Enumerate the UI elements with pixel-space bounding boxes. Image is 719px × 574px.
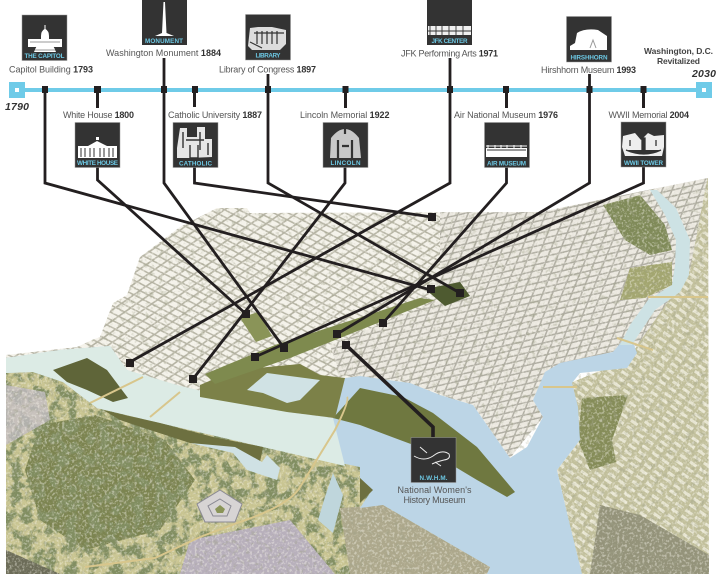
label: Lincoln Memorial: Lincoln Memorial 1922 <box>300 110 390 120</box>
icon: Hirshhorn: HIRSHHORN <box>570 54 608 62</box>
icon: WWII Tower: WWII TOWER <box>624 160 663 167</box>
map: pale upstream water <box>6 346 345 466</box>
line: National Women's History Museum <box>346 345 433 437</box>
label: Washington Monument: Washington Monument 1884 <box>106 48 221 58</box>
line: JFK Performing Arts <box>130 58 450 362</box>
icon: N.W.H.M.: N.W.H.M. <box>420 475 448 482</box>
end marker 2030 <box>691 68 716 98</box>
icon: Lincoln <box>323 122 368 168</box>
heading: Washington, D.C. Revitalized: Washington, D.C. <box>644 46 713 56</box>
icon: Monument <box>142 0 187 45</box>
timeline nodes <box>42 86 646 93</box>
map: upper river parkland <box>603 195 672 255</box>
connector lines <box>45 58 644 437</box>
map: East Potomac Park <box>333 388 515 497</box>
line: Lincoln Memorial <box>193 167 345 379</box>
icon: The Capitol <box>22 15 67 60</box>
map: small island <box>360 478 373 503</box>
line: Hirshhorn Museum <box>337 74 590 334</box>
map: Arlington cemetery forest <box>25 415 195 550</box>
line: Catholic University <box>194 167 432 217</box>
start marker 1790: 1790 <box>5 101 29 113</box>
map: northeast city blocks <box>440 170 709 400</box>
heading: Washington, D.C. Revitalized <box>644 46 713 66</box>
map: Arlington forest tone <box>6 372 369 574</box>
line: Air National Museum <box>383 167 506 323</box>
label: Air National Museum: Air National Museum 1976 <box>454 110 558 120</box>
icon: Lincoln: LINCOLN <box>330 160 361 167</box>
map: southeast land <box>555 170 709 574</box>
line: Washington Monument <box>164 58 284 348</box>
icon: The Capitol: THE CAPITOL <box>24 53 65 60</box>
heading: Washington, D.C. Revitalized: Revitalized <box>657 56 700 66</box>
line: Library of Congress <box>268 74 460 293</box>
map: Columbia Island <box>103 410 263 462</box>
map: dark grain texture <box>0 170 719 574</box>
map: water of the Potomac <box>6 340 637 574</box>
timeline bar <box>17 88 705 92</box>
map: Virginia land <box>0 360 500 574</box>
label: Hirshhorn Museum: Hirshhorn Museum 1993 <box>541 65 636 75</box>
map: Roaches Run <box>318 473 343 533</box>
line: Capitol Building <box>45 89 431 290</box>
map: south Arlington neighbourhood <box>180 520 335 574</box>
map: southwest waterfront <box>330 300 560 458</box>
label: White House: White House 1800 <box>63 110 134 120</box>
map: Pentagon lagoon <box>190 443 280 480</box>
map: White House park <box>240 312 272 342</box>
icon: Catholic <box>173 122 218 168</box>
map: airport land <box>340 505 490 574</box>
map: bottom right shaded land <box>590 505 709 574</box>
map location markers <box>126 213 464 383</box>
start marker 1790 <box>5 82 29 113</box>
icon: White House: WHITE HOUSE <box>77 160 118 167</box>
label: JFK Performing Arts: JFK Performing Arts 1971 <box>401 48 498 58</box>
map: river bend parkland <box>620 262 672 300</box>
label: History Museum line: History Museum <box>404 495 466 505</box>
icon: Library <box>246 14 290 60</box>
end marker 2030: 2030 <box>691 68 716 80</box>
timeline stems <box>96 89 645 108</box>
map: Pentagon <box>197 490 242 522</box>
icon: Air Museum: AIR MUSEUM <box>487 160 526 168</box>
map: Capitol grounds <box>425 282 470 306</box>
icon: JFK Center: JFK CENTER <box>432 38 468 45</box>
label: Catholic University: Catholic University 1887 <box>168 110 262 120</box>
icon: JFK Center <box>427 0 472 45</box>
icon: N.W.H.M. <box>411 438 456 482</box>
map: Anacostia upper river <box>620 190 690 345</box>
label: Library of Congress: Library of Congress 1897 <box>219 64 316 74</box>
map: road bridges <box>85 297 708 567</box>
icon: White House <box>75 122 120 168</box>
icon: WWII Tower <box>621 122 666 167</box>
map: Tidal Basin <box>247 373 320 403</box>
icon: Catholic: CATHOLIC <box>179 160 212 168</box>
map: light speckle texture <box>0 170 719 574</box>
line: White House <box>98 167 246 314</box>
icon: Hirshhorn <box>566 16 612 62</box>
label: WWII Memorial: WWII Memorial 2004 <box>608 110 689 120</box>
map: Anacostia park <box>578 395 628 470</box>
icon: Monument: MONUMENT <box>145 38 183 45</box>
label: National Women's History Museum: National Women's <box>398 485 472 495</box>
aerial map of Washington, D.C. <box>0 170 719 574</box>
map: Tidal Basin park <box>200 364 345 418</box>
map: northwest city blocks <box>6 208 470 418</box>
map: National Mall <box>205 298 435 384</box>
icon: Air Museum <box>484 122 530 168</box>
line: WWII Memorial <box>255 167 644 357</box>
map: southwest corner <box>6 550 60 574</box>
icon: Library: LIBRARY <box>256 52 281 60</box>
map: Rosslyn neighbourhood <box>6 385 50 445</box>
event labels <box>9 48 689 495</box>
map: Roosevelt Island <box>53 358 128 402</box>
label: Capitol Building: Capitol Building 1793 <box>9 64 93 74</box>
